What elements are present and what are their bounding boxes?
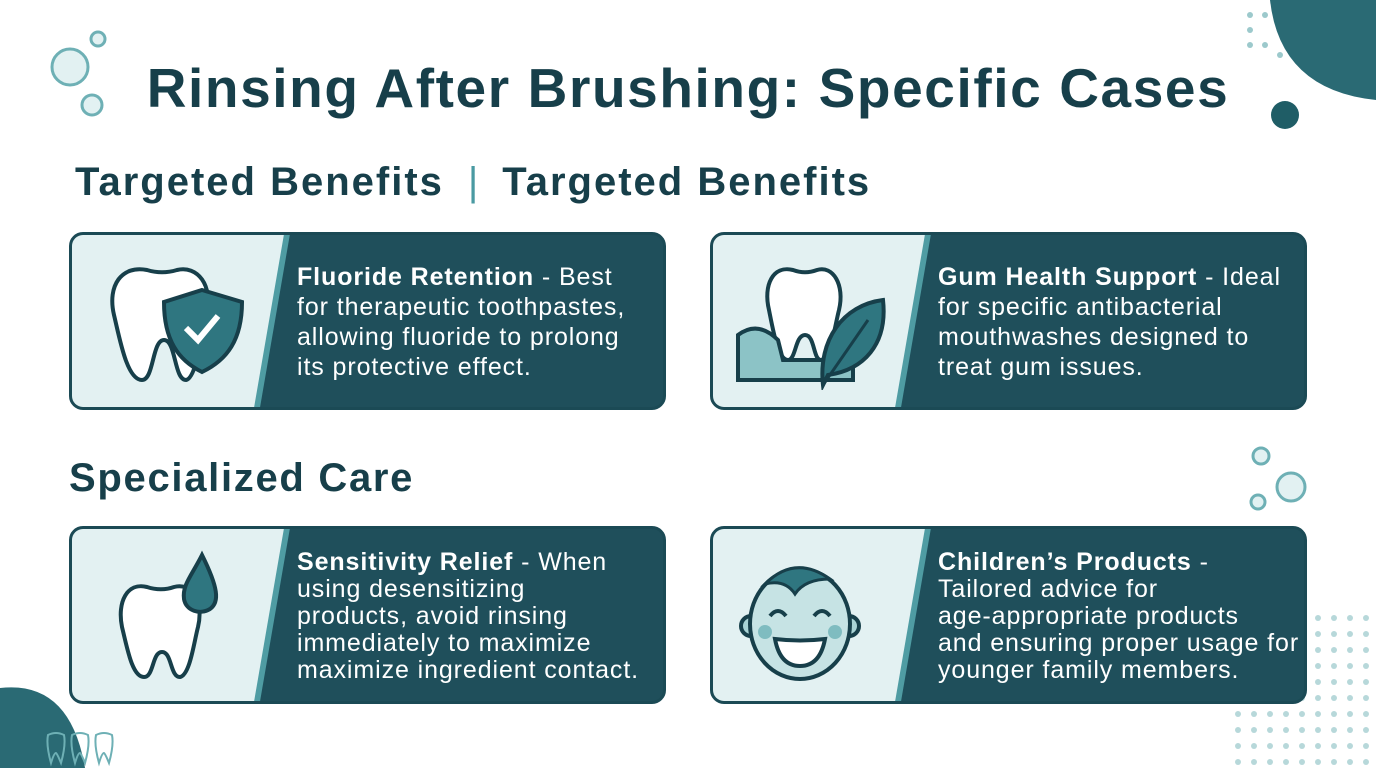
text: immediately to maximize xyxy=(297,629,591,657)
icon: child face xyxy=(739,566,861,681)
text: age-appropriate products xyxy=(938,602,1239,630)
heading: specialized care: Specialized Care xyxy=(69,456,414,500)
text: allowing fluoride to prolong xyxy=(297,323,620,351)
text: Tailored advice for xyxy=(938,575,1158,603)
decoration: dots bottom right xyxy=(1235,615,1369,765)
text: for therapeutic toothpastes, xyxy=(297,293,625,321)
text: treat gum issues. xyxy=(938,353,1144,381)
heading: targeted benefits: Targeted Benefits | Targeted Benefits xyxy=(75,160,871,204)
text xyxy=(297,548,639,684)
text: using desensitizing xyxy=(297,575,525,603)
text: younger family members. xyxy=(938,656,1239,684)
text: and ensuring proper usage for xyxy=(938,629,1299,657)
icon: tooth with drop xyxy=(118,550,218,679)
text: for specific antibacterial xyxy=(938,293,1223,321)
text xyxy=(938,548,1299,684)
icon: tooth with shield xyxy=(110,267,244,382)
card: sensitivity relief xyxy=(69,526,666,704)
title: Rinsing After Brushing: Specific Cases xyxy=(147,57,1229,119)
card: fluoride retention xyxy=(69,232,666,410)
decoration: bottom left blob with teeth xyxy=(0,687,114,768)
text xyxy=(938,263,1281,381)
text: Sensitivity Relief - When xyxy=(297,548,607,576)
text: products, avoid rinsing xyxy=(297,602,568,630)
text: maximize ingredient contact. xyxy=(297,656,639,684)
text xyxy=(297,263,625,381)
decoration: top right blob xyxy=(1247,0,1376,129)
decoration: bubbles top left xyxy=(50,30,106,116)
text: mouthwashes designed to xyxy=(938,323,1249,351)
card: children's products xyxy=(710,526,1307,704)
text: Fluoride Retention - Best xyxy=(297,263,613,291)
decoration: bubbles right xyxy=(1250,446,1306,510)
text: Children’s Products - xyxy=(938,548,1209,576)
icon: tooth with leaf xyxy=(736,267,886,390)
text: Gum Health Support - Ideal xyxy=(938,263,1281,291)
card: gum health xyxy=(710,232,1307,410)
text: its protective effect. xyxy=(297,353,532,381)
